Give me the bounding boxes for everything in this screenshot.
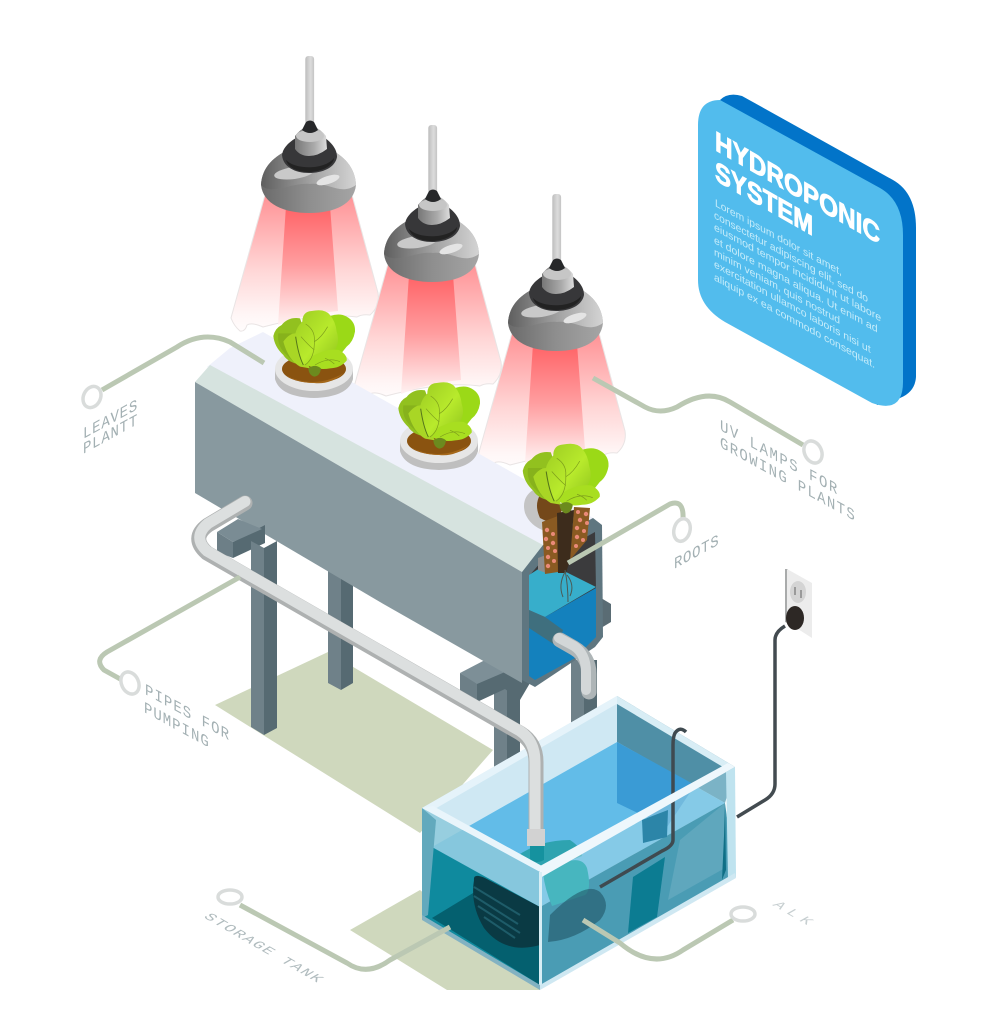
table leg: front right (571, 660, 597, 725)
floor mat: lower (350, 890, 540, 990)
pump dome through surface (517, 829, 582, 872)
lamp 2 (354, 125, 501, 400)
pot 1 with lettuce (273, 310, 355, 398)
card side (720, 95, 916, 405)
card body text: et dolore magna aliqua. Ut enim ad (714, 235, 878, 336)
lettuce 3 (523, 444, 609, 514)
table leg: front left (251, 541, 277, 735)
card body text (714, 198, 881, 371)
tank back rim (422, 696, 735, 810)
lower deep water (529, 627, 577, 680)
pump dome behind right glass (543, 860, 589, 906)
table top surface (207, 332, 593, 545)
floor mat: upper (215, 652, 493, 833)
callout: storage tank (199, 890, 450, 985)
lamp 1 (231, 56, 378, 331)
lamp 3 (478, 194, 625, 469)
water surface (529, 563, 596, 617)
grow table (195, 332, 593, 683)
callout: roots (568, 503, 719, 574)
callout: roots: ROOTS (674, 532, 719, 574)
callout: leaves plant (80, 337, 264, 459)
callout: pipes for pumping: PIPES FOR (145, 681, 229, 745)
card body text: consectetur adipiscing elit, sed do (714, 210, 868, 306)
power cable (737, 626, 785, 817)
water surface left (432, 742, 725, 907)
callout: pipes for pumping: PUMPING (144, 699, 209, 753)
callout: uv lamps: GROWING PLANTS (720, 434, 855, 526)
info card (698, 95, 916, 406)
section air cavity (529, 532, 596, 617)
section cutaway: end of grow channel (522, 518, 603, 687)
card body text: aliquip ex ea commodo consequat. (714, 272, 875, 371)
tank left glass above water (422, 808, 540, 907)
tank left face below water (422, 847, 540, 988)
tank right glass reflection (628, 857, 665, 933)
pot 3 cutaway ring and soil (524, 490, 562, 573)
lighter lower right panel (668, 803, 725, 900)
card body text: minim veniam, quis nostrud (714, 247, 840, 327)
crossbar: right (460, 660, 530, 702)
tank front rim (422, 763, 736, 990)
card body text: exercitation ullamco laboris nisi ut (714, 259, 871, 356)
callout: leaves plant: LEAVES (83, 396, 137, 444)
pot 2 with lettuce (398, 382, 480, 470)
wall outlet (785, 569, 812, 638)
plug (786, 606, 804, 630)
callout: alkaline pump (583, 900, 816, 959)
table leg: back left (328, 560, 353, 690)
tank floor through left face (432, 887, 540, 985)
inner pipe band (529, 610, 563, 647)
crossbar: left (217, 519, 265, 558)
outlet pipe from section (559, 638, 589, 692)
section frame (522, 518, 603, 687)
table leg: back right (494, 680, 520, 770)
table front face (195, 382, 522, 683)
callout: uv lamps: UV LAMPS FOR (720, 417, 838, 500)
pump pipe (199, 502, 536, 832)
roots in clay pebbles (542, 507, 590, 602)
callout: storage tank: STORAGE TANK (199, 912, 326, 985)
tank right face above water (540, 767, 735, 907)
inner cable (600, 729, 686, 887)
callout: uv lamps (593, 378, 855, 526)
pump motor ribs (473, 876, 540, 948)
tank right face below water (540, 803, 735, 988)
card body text: Lorem ipsum dolor sit amet, (715, 198, 842, 279)
socket (790, 581, 806, 603)
tank back-right wall above water (617, 696, 735, 803)
table bevel (195, 365, 543, 572)
callout: pipes for pumping (100, 577, 240, 753)
tank back-left wall above water (422, 696, 617, 847)
water surface right shade (617, 742, 695, 827)
deep water (545, 588, 596, 658)
left corner reflection (422, 808, 436, 918)
callout: alkaline pump: ALK (768, 900, 816, 927)
card title: HYDROPONIC (715, 125, 880, 250)
card body text: eiusmod tempor incididunt ut labore (714, 222, 881, 325)
pump shadow (548, 889, 606, 942)
card title: SYSTEM (715, 155, 813, 242)
card face (698, 100, 903, 406)
crossbar end: section right (601, 598, 611, 628)
callout: leaves plant: PLANTT (83, 411, 137, 459)
water tank (199, 502, 736, 990)
